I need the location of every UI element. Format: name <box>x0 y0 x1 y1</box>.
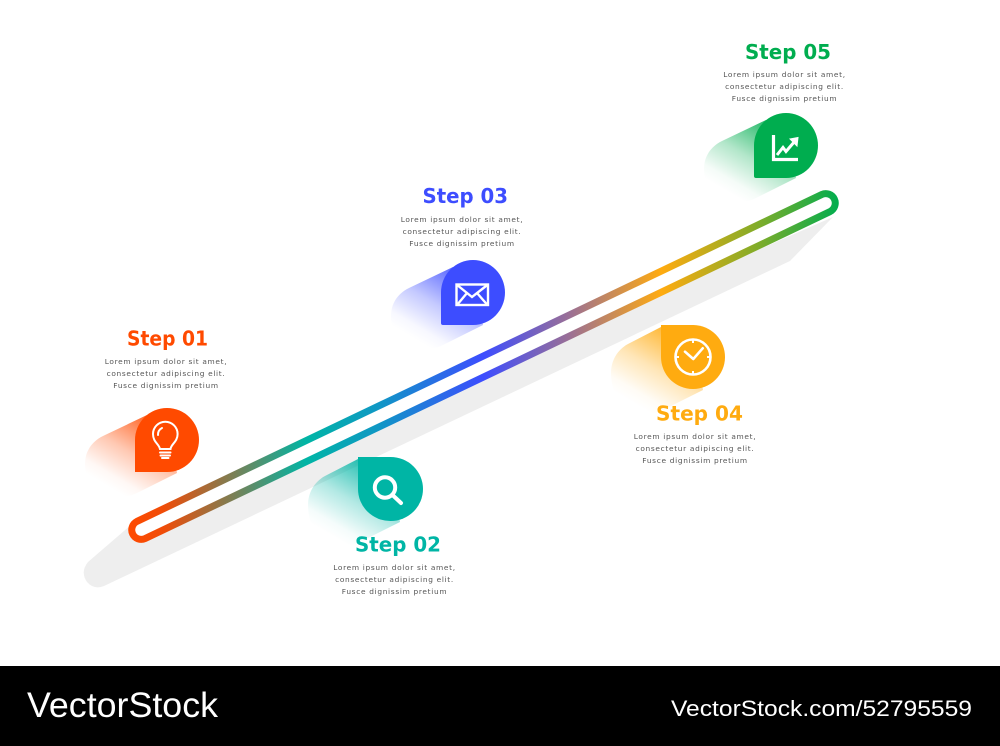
timeline shadow <box>84 217 833 587</box>
step 03 marker <box>441 260 505 325</box>
step 03 text: consectetur adipiscing elit. <box>403 227 521 236</box>
step 02 text: Lorem ipsum dolor sit amet, <box>333 563 456 572</box>
step 05 marker trail <box>704 120 796 202</box>
footer url: VectorStock.com/52795559 <box>671 696 972 721</box>
step 02 <box>308 457 456 596</box>
step 03 text: Lorem ipsum dolor sit amet, <box>401 215 523 224</box>
step 05 text: Lorem ipsum dolor sit amet, <box>723 70 846 79</box>
step 02 marker trail <box>308 459 400 546</box>
step 04 marker trail <box>611 327 703 414</box>
icon: growth chart <box>774 135 798 160</box>
footer logo: VectorStock <box>27 686 219 725</box>
step 04 text: Fusce dignissim pretium <box>642 456 748 465</box>
step 02 marker <box>358 457 423 521</box>
step 04 marker <box>661 325 725 389</box>
icon: clock <box>676 340 710 374</box>
step 01 marker trail <box>85 415 177 497</box>
step 02 text: Fusce dignissim pretium <box>342 587 447 596</box>
step 01 text: consectetur adipiscing elit. <box>107 369 225 378</box>
step 05 heading: Step 05 <box>745 40 831 64</box>
step 04 text: Lorem ipsum dolor sit amet, <box>634 432 756 441</box>
step 01 <box>85 326 227 497</box>
icon: light bulb <box>153 422 178 458</box>
step 01 heading: Step 01 <box>127 326 208 350</box>
timeline track <box>132 194 835 539</box>
step 01 text: Fusce dignissim pretium <box>113 381 219 390</box>
step 05 marker <box>754 113 818 178</box>
step 03 <box>391 184 523 349</box>
icon: magnifier <box>375 477 401 503</box>
step 04 text: consectetur adipiscing elit. <box>636 444 754 453</box>
icon: envelope <box>456 284 488 305</box>
step 05 <box>704 40 846 202</box>
step 01 text: Lorem ipsum dolor sit amet, <box>105 357 227 366</box>
step 04 heading: Step 04 <box>656 402 743 426</box>
step 02 text: consectetur adipiscing elit. <box>335 575 454 584</box>
watermark footer band <box>0 666 1000 746</box>
step 03 text: Fusce dignissim pretium <box>409 239 515 248</box>
step 04 <box>611 325 756 465</box>
step 05 text: consectetur adipiscing elit. <box>725 82 844 91</box>
step 05 text: Fusce dignissim pretium <box>732 94 837 103</box>
step 01 marker <box>135 408 199 472</box>
step 02 heading: Step 02 <box>355 532 441 556</box>
step 03 heading: Step 03 <box>422 184 508 208</box>
step 03 marker trail <box>391 267 483 349</box>
